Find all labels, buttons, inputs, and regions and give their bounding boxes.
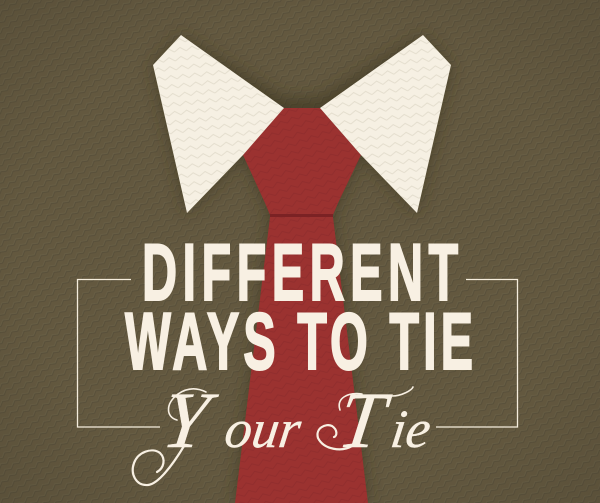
script title: Your Tie bbox=[133, 376, 435, 485]
script title: Your Tie: Y bbox=[157, 376, 222, 465]
title line: WAYS TO TIE: WAYS TO TIE bbox=[125, 297, 473, 387]
title frame bracket bbox=[78, 280, 518, 427]
script title: Your Tie: T bbox=[333, 376, 396, 465]
left collar wing bbox=[153, 35, 284, 213]
tie knot bbox=[243, 108, 361, 217]
title line: DIFFERENT: DIFFERENT bbox=[142, 228, 458, 318]
script title: Your Tie: our bbox=[221, 399, 306, 459]
tie blade bbox=[235, 217, 368, 503]
decorative swashes bbox=[133, 387, 413, 485]
shadow under collar and tie bbox=[153, 35, 451, 503]
script title: Your Tie: ie bbox=[387, 399, 435, 459]
right collar wing bbox=[320, 35, 451, 213]
